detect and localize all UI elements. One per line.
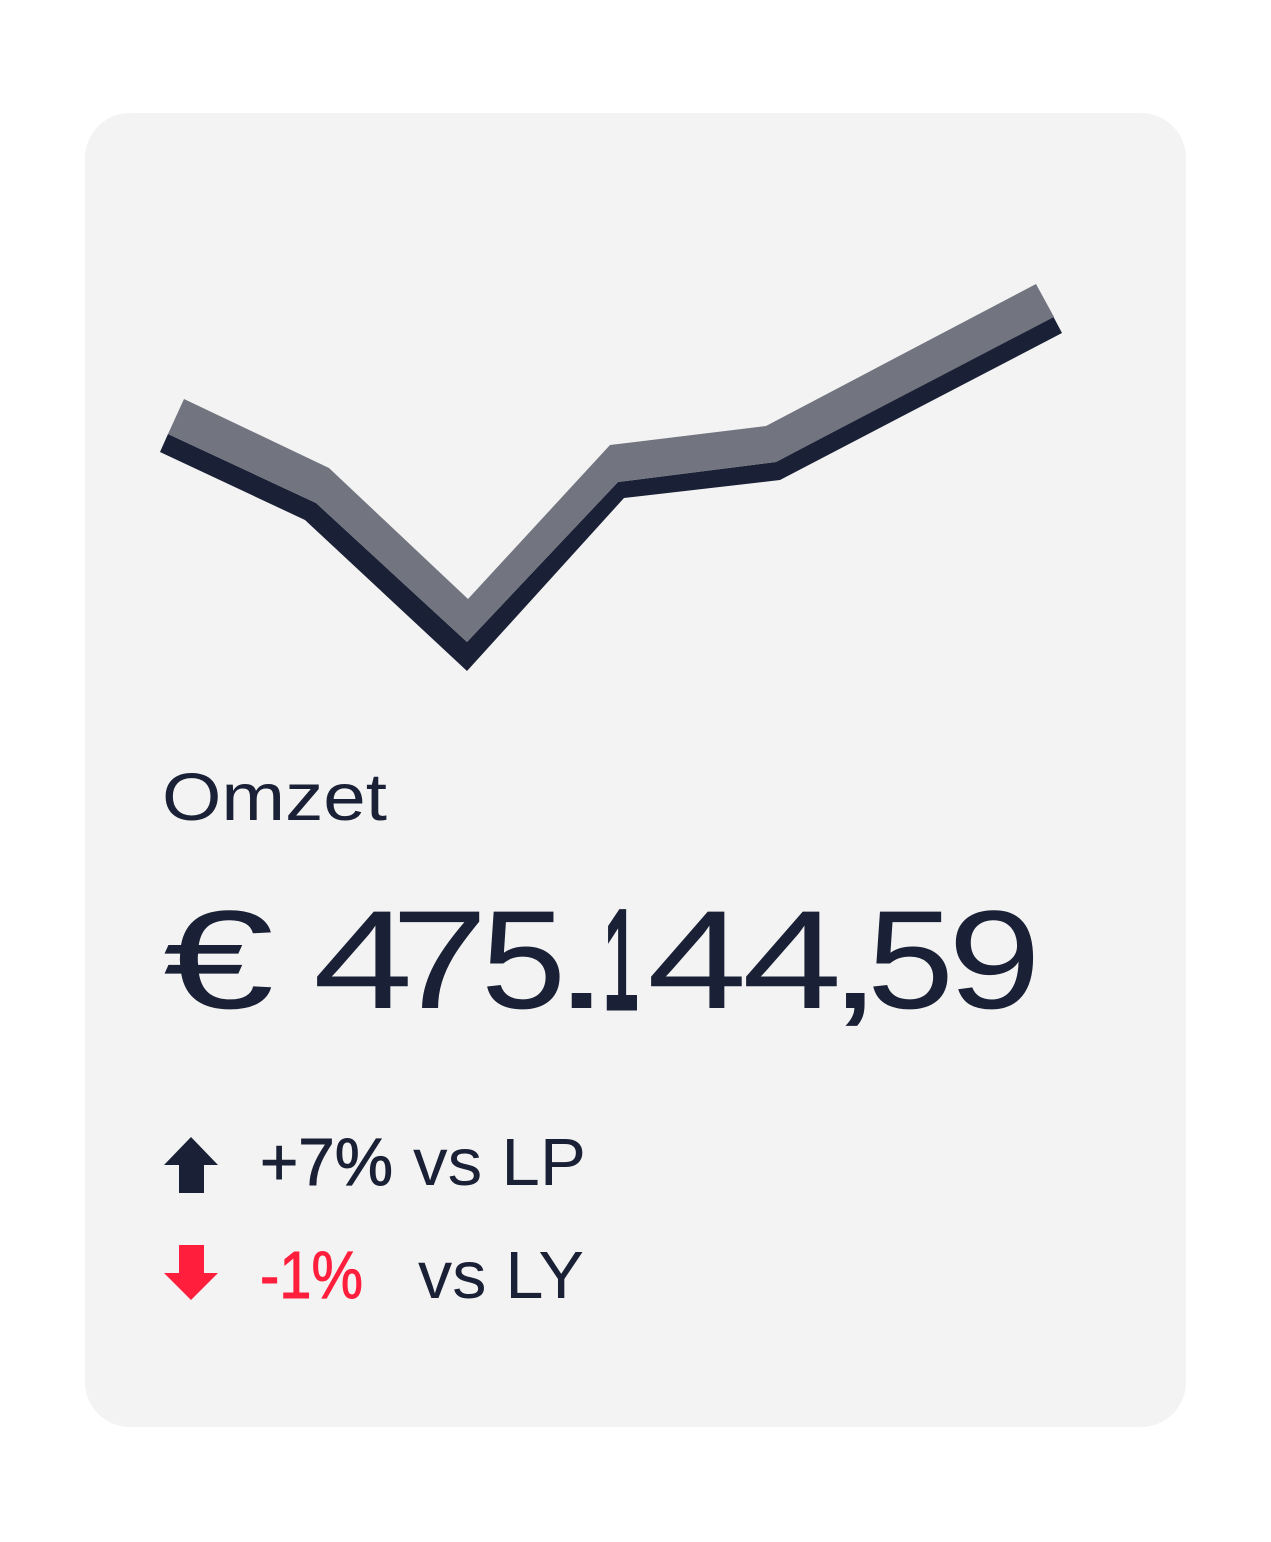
value: revenue amount: 9 (948, 881, 1041, 1038)
value: revenue amount: 7 (391, 881, 488, 1038)
icon: down arrow (164, 1245, 218, 1300)
value: revenue amount: , (828, 881, 882, 1038)
value: revenue amount: 4 (647, 881, 747, 1038)
value: revenue amount: € (163, 881, 274, 1038)
comparison: -1% vs LY (260, 1238, 584, 1313)
value: revenue amount: 5 (867, 881, 954, 1038)
value: revenue amount: 4 (742, 881, 842, 1038)
heading: Omzet: Omzet (162, 760, 387, 835)
comparison: +7% vs LP (260, 1125, 586, 1200)
value: revenue amount: 5 (481, 881, 566, 1038)
panel: KPI card (85, 113, 1186, 1427)
line chart: revenue trend (160, 284, 1062, 671)
comparison: -1% vs LY: -1% (260, 1238, 363, 1313)
value: revenue amount: 1 (603, 881, 639, 1038)
comparison: +7% vs LP: vs LP (413, 1125, 586, 1200)
icon: up arrow (164, 1137, 218, 1193)
value: revenue amount: . (553, 881, 610, 1038)
value: revenue amount: 4 (313, 881, 413, 1038)
value: revenue amount (163, 881, 1041, 1038)
comparison: -1% vs LY: vs LY (418, 1238, 584, 1313)
comparison: +7% vs LP: +7% (260, 1125, 393, 1200)
